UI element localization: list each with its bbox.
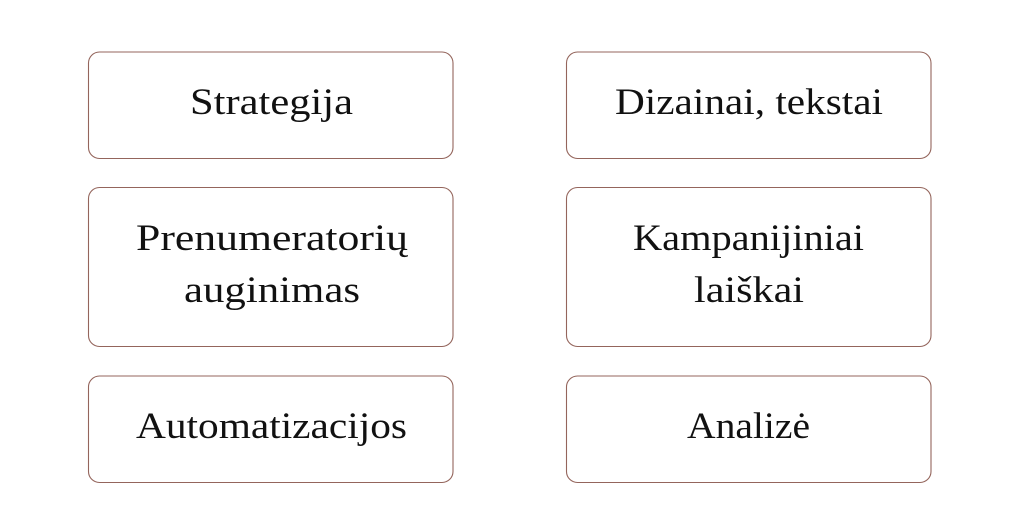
panel: Analizė: Analizė [687,406,810,447]
panel: Automatizacijos: Automatizacijos [136,406,407,447]
panel: Kampanijiniai laiškai: Kampanijiniai [633,218,864,259]
panel: Kampanijiniai laiškai [566,188,931,346]
panel: Automatizacijos [88,376,453,482]
panel: Analizė [566,376,931,482]
panel: Strategija: Strategija [190,82,353,123]
panel: Prenumeratorių auginimas: Prenumeratorių [136,218,409,259]
panel: Kampanijiniai laiškai: laiškai [694,270,804,311]
panel: Dizainai, tekstai [566,52,931,158]
panel: Prenumeratorių auginimas: auginimas [184,270,360,311]
panel: Dizainai, tekstai: Dizainai, tekstai [615,82,883,123]
panel: Strategija [88,52,453,158]
panel: Prenumeratorių auginimas [88,188,453,346]
